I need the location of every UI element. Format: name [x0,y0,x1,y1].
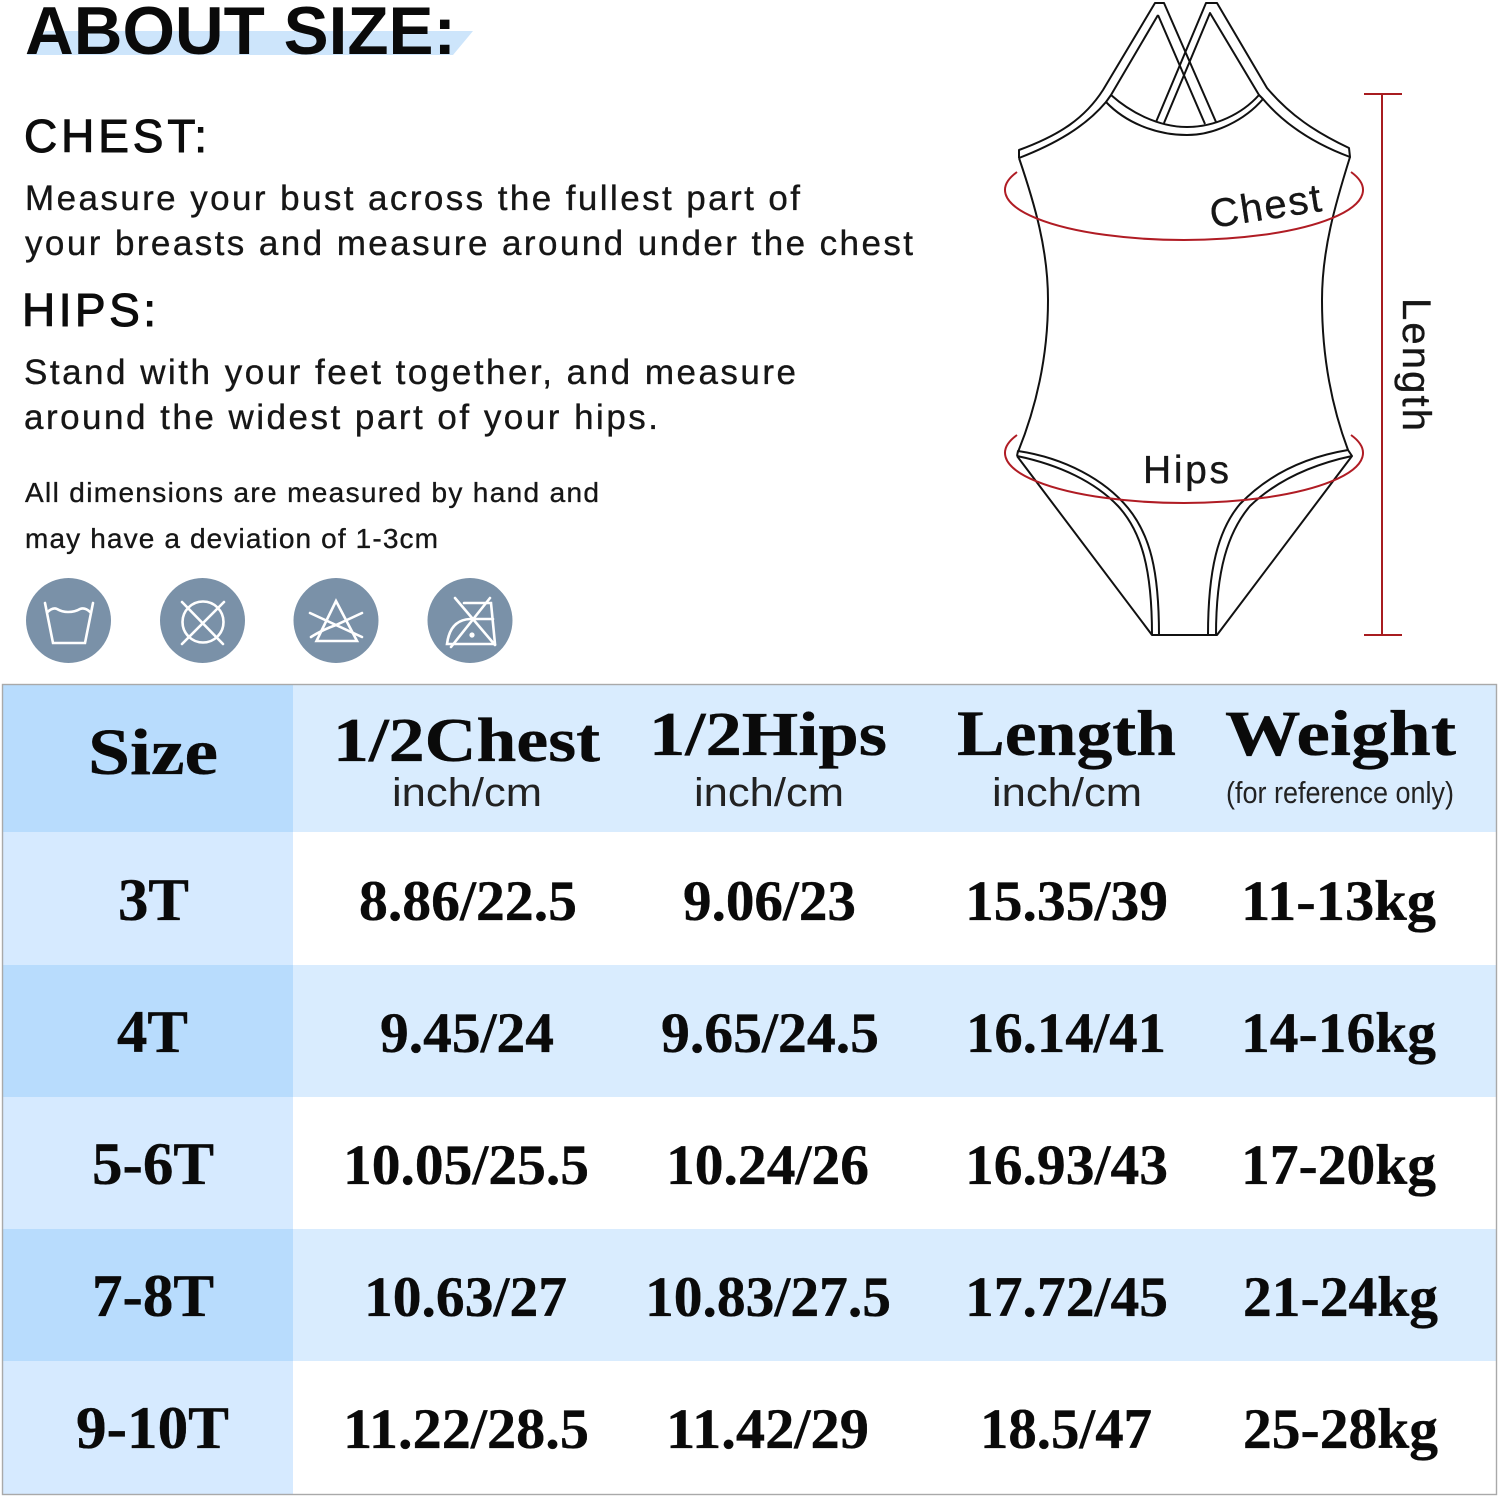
text block: chest instructions: Measure your bust across the fullest part of [25,179,800,218]
table header row: 1/2Hips [649,701,887,769]
table header row [88,698,1456,815]
row: 5-6T: 5-6T [92,1131,214,1197]
label: hips: Hips [1143,449,1229,492]
row: 5-6T: 10.24/26 [666,1134,869,1197]
row: 4T [117,999,1436,1065]
row: 4T: 16.14/41 [966,1002,1166,1065]
heading: hips: HIPS: [22,284,156,336]
text block: hips instructions [24,353,796,437]
heading: chest: CHEST: [24,110,207,162]
row: 9-10T [76,1395,1438,1461]
text block: hips instructions: Stand with your feet together, and measure [24,353,796,392]
row: 9-10T: 18.5/47 [980,1398,1152,1461]
row: 3T: 3T [118,867,189,933]
chest measurement line [1005,172,1363,240]
row: 7-8T: 7-8T [92,1263,214,1329]
row: 3T [118,867,1436,933]
row: 3T: 8.86/22.5 [359,870,577,933]
row: 5-6T: 10.05/25.5 [343,1134,589,1197]
table header row: inch/cm [992,771,1142,815]
label: chest: Chest [1207,176,1324,237]
row: 5-6T: 17-20kg [1241,1134,1436,1197]
text block: measurement note [25,477,599,554]
row: 9-10T: 25-28kg [1243,1398,1438,1461]
row: 9-10T: 11.22/28.5 [343,1398,589,1461]
row: 3T: 11-13kg [1241,870,1436,933]
icon: do not iron [428,578,512,663]
table header row: Length [957,698,1176,770]
row: 3T: 15.35/39 [965,870,1168,933]
text block: chest instructions [25,179,913,263]
row: 9-10T: 9-10T [76,1395,229,1461]
size chart table [2,684,1497,1495]
text block: measurement note: may have a deviation of 1-3cm [25,523,438,554]
table backgrounds [2,684,1497,1495]
row: 9-10T: 11.42/29 [666,1398,869,1461]
row: 7-8T: 17.72/45 [965,1266,1168,1329]
icon: do not bleach [294,578,378,663]
table header row: inch/cm [694,771,844,815]
table header row: 1/2Chest [333,707,600,775]
table header row: Size [88,716,218,789]
garment diagram [1005,3,1438,635]
text block: measurement note: All dimensions are measured by hand and [25,477,599,508]
row: 7-8T: 21-24kg [1243,1266,1438,1329]
row: 4T: 14-16kg [1241,1002,1436,1065]
row: 5-6T [92,1131,1436,1197]
table header row: (for reference only) [1226,775,1454,810]
row: 4T: 9.45/24 [380,1002,554,1065]
table header row: inch/cm [392,771,542,815]
row: 4T: 9.65/24.5 [661,1002,879,1065]
row: 7-8T [92,1263,1438,1329]
text block: chest instructions: your breasts and measure around under the chest [25,224,913,263]
icon: hand wash [26,578,111,663]
row: 4T: 4T [117,999,188,1065]
length measurement line [1364,94,1402,635]
text block: hips instructions: around the widest part of your hips. [24,398,658,437]
row: 3T: 9.06/23 [683,870,856,933]
garment outline: swimsuit [1017,3,1352,635]
hips measurement line [1005,435,1363,503]
label: length: Length [1394,298,1438,431]
table header row: Weight [1225,698,1456,770]
row: 5-6T: 16.93/43 [965,1134,1168,1197]
row: 7-8T: 10.63/27 [364,1266,567,1329]
row: 7-8T: 10.83/27.5 [645,1266,891,1329]
icon: do not tumble dry [160,578,245,663]
